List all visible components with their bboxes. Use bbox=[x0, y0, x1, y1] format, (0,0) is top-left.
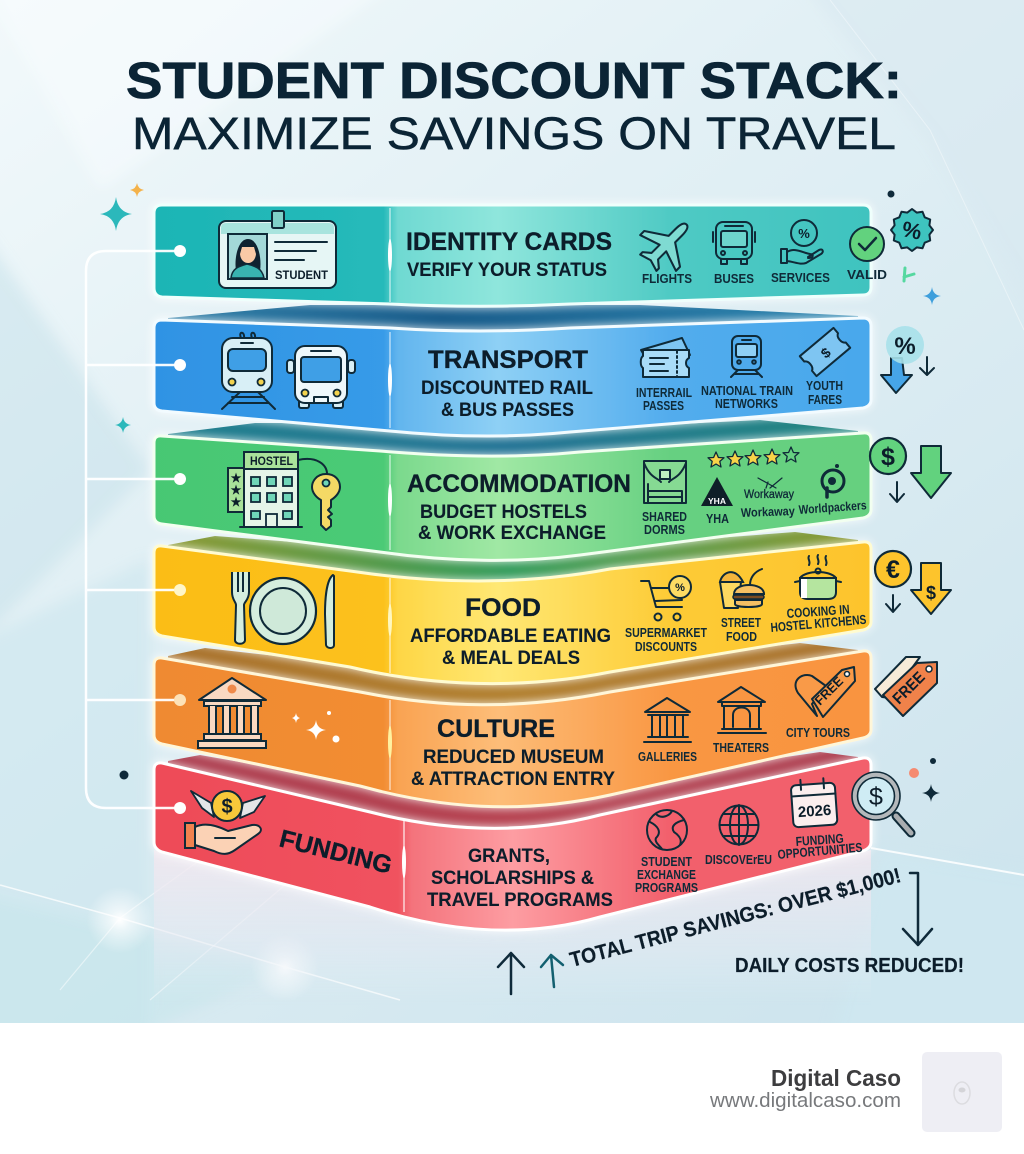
icon: street food bbox=[720, 569, 764, 608]
label: student exchange programs bbox=[635, 854, 698, 895]
label: buses: BUSES bbox=[714, 271, 754, 286]
text: transport description bbox=[421, 377, 593, 421]
label: student exchange programs: STUDENT bbox=[641, 854, 692, 869]
icon: cooking pot with steam bbox=[795, 555, 841, 599]
label: cooking in hostel kitchens: HOSTEL KITCHENS bbox=[770, 612, 867, 635]
label: flights: FLIGHTS bbox=[642, 271, 692, 286]
icon: galleries bbox=[644, 698, 691, 742]
label: shared dorms: SHARED bbox=[642, 509, 687, 524]
icon: dollar coin and arrows: $ bbox=[881, 443, 895, 471]
text: accommodation description bbox=[418, 501, 606, 544]
icon: theaters bbox=[718, 687, 766, 733]
icon: free price tag bbox=[875, 657, 937, 716]
label: cooking in hostel kitchens bbox=[770, 602, 867, 635]
icon: services hand bbox=[781, 220, 823, 264]
text: culture description bbox=[411, 746, 615, 790]
funding band reflection bbox=[154, 850, 871, 1005]
decorative sparkles left bbox=[100, 183, 144, 780]
panel: accommodation bbox=[154, 433, 871, 560]
icon: magnifying glass: $ bbox=[869, 783, 883, 811]
arrow: up small bbox=[541, 955, 563, 987]
label: funding opportunities bbox=[777, 831, 863, 862]
icon: percent drop arrows: % bbox=[894, 333, 916, 360]
icon: plane bbox=[630, 207, 704, 281]
icon: services hand: % bbox=[798, 226, 810, 241]
icon: hostel building and key bbox=[228, 452, 340, 530]
text: funding description: GRANTS, bbox=[468, 845, 550, 867]
text: culture description: REDUCED MUSEUM bbox=[423, 746, 604, 768]
icon: discovereu globe bbox=[720, 805, 758, 845]
icon: shared dorm bbox=[644, 461, 686, 503]
heading: culture: CULTURE bbox=[437, 715, 555, 743]
text: funding description bbox=[427, 845, 613, 911]
icon: train and bus bbox=[222, 333, 355, 409]
icon: supermarket cart bbox=[641, 576, 691, 620]
callout: daily costs reduced: DAILY COSTS REDUCED! bbox=[735, 955, 964, 977]
label: national train networks: NATIONAL TRAIN bbox=[701, 383, 793, 398]
icon: interrail ticket bbox=[641, 338, 690, 377]
icon: free price tag: FREE bbox=[890, 669, 929, 708]
label: galleries: GALLERIES bbox=[638, 749, 697, 764]
text: accommodation description: & WORK EXCHANGE bbox=[418, 522, 606, 544]
footer url: www.digitalcaso.com bbox=[709, 1090, 901, 1112]
label: cooking in hostel kitchens: COOKING IN bbox=[786, 602, 850, 621]
icon: euro coin and arrows bbox=[875, 551, 951, 614]
label: shared dorms bbox=[642, 509, 687, 537]
label: national train networks bbox=[701, 383, 793, 411]
heading: identity cards: IDENTITY CARDS bbox=[406, 228, 612, 256]
label: funding opportunities: FUNDING bbox=[795, 831, 844, 849]
icon: fork plate and knife bbox=[232, 572, 334, 648]
panel: identity cards bbox=[154, 205, 887, 306]
label: youth fares: YOUTH bbox=[806, 378, 843, 393]
icon: workaway logo: Workaway bbox=[744, 489, 794, 501]
icon: yha logo: YHA bbox=[708, 496, 726, 506]
label: theaters: THEATERS bbox=[713, 740, 769, 755]
heading: accommodation: ACCOMMODATION bbox=[407, 470, 631, 498]
label: discovereu: DISCOVErEU bbox=[705, 852, 772, 867]
label: youth fares: FARES bbox=[808, 392, 842, 407]
label: worldpackers: Worldpackers bbox=[798, 498, 867, 517]
icon: euro coin and arrows: $ bbox=[926, 583, 936, 603]
icon: hostel building and key: HOSTEL bbox=[250, 456, 293, 468]
icon: national train bbox=[731, 336, 762, 377]
icon: student id card bbox=[219, 211, 336, 288]
label: workaway: Workaway bbox=[741, 504, 795, 520]
icon: percent badge: % bbox=[900, 216, 924, 245]
label: youth fares bbox=[806, 378, 843, 407]
callout: total trip savings: TOTAL TRIP SAVINGS: OVER $1,000! bbox=[567, 864, 903, 972]
icon: museum bbox=[198, 678, 266, 748]
icon: supermarket cart: % bbox=[675, 582, 685, 594]
icon: winged coin and hand bbox=[185, 791, 265, 854]
icon: hostel building and key: ★ bbox=[231, 471, 242, 485]
text: funding description: SCHOLARSHIPS & bbox=[431, 867, 594, 889]
decorative dots near magnifier bbox=[909, 758, 940, 802]
label: street food: STREET bbox=[721, 615, 761, 630]
icon: winged coin and hand: $ bbox=[221, 796, 233, 818]
heading: food: FOOD bbox=[465, 594, 541, 622]
text: food description: AFFORDABLE EATING bbox=[410, 625, 611, 647]
icon: percent badge bbox=[888, 190, 941, 305]
icon: percent drop arrows bbox=[881, 326, 934, 393]
label: supermarket discounts: DISCOUNTS bbox=[635, 639, 697, 654]
icon: student id card: STUDENT bbox=[275, 270, 328, 282]
icon: student exchange globe bbox=[647, 810, 687, 850]
text: food description: & MEAL DEALS bbox=[442, 647, 580, 669]
icon: 2026 calendar bbox=[790, 778, 838, 827]
label: shared dorms: DORMS bbox=[644, 522, 685, 537]
icon: free city tour tag: FREE bbox=[812, 673, 846, 708]
text: culture description: & ATTRACTION ENTRY bbox=[411, 768, 615, 790]
heading: transport: TRANSPORT bbox=[428, 346, 588, 374]
icon: youth fare ticket: $ bbox=[818, 344, 834, 361]
label: supermarket discounts bbox=[625, 625, 707, 654]
label: services: SERVICES bbox=[771, 270, 830, 285]
text: identity cards description: VERIFY YOUR STATUS bbox=[407, 259, 607, 281]
text: food description bbox=[410, 625, 611, 669]
label: interrail passes: INTERRAIL bbox=[636, 385, 692, 400]
label: city tours: CITY TOURS bbox=[786, 725, 850, 740]
label: interrail passes: PASSES bbox=[643, 398, 684, 413]
arrow: down bbox=[903, 873, 932, 945]
panel: funding bbox=[154, 758, 871, 930]
panel: food bbox=[154, 542, 871, 684]
label: supermarket discounts: SUPERMARKET bbox=[625, 625, 707, 640]
icon: youth fare ticket bbox=[800, 328, 850, 376]
icon: dollar coin and arrows bbox=[870, 438, 951, 502]
text: funding description: TRAVEL PROGRAMS bbox=[427, 889, 613, 911]
icon: euro coin and arrows: € bbox=[886, 556, 900, 584]
heading: funding: FUNDING bbox=[277, 825, 395, 880]
title: MAXIMIZE SAVINGS ON TRAVEL bbox=[132, 108, 896, 159]
icon: yha logo bbox=[701, 477, 733, 506]
label: yha: YHA bbox=[706, 511, 730, 526]
icon: valid check bbox=[850, 227, 884, 261]
icon: 2026 calendar: 2026 bbox=[797, 802, 832, 821]
panel: transport bbox=[154, 318, 871, 436]
label: student exchange programs: PROGRAMS bbox=[635, 880, 698, 895]
icon: star rating bbox=[708, 447, 799, 467]
icon: hostel building and key: ★ bbox=[231, 483, 242, 497]
title: STUDENT DISCOUNT STACK: bbox=[126, 52, 902, 109]
label: street food: FOOD bbox=[726, 629, 757, 644]
text: transport description: DISCOUNTED RAIL bbox=[421, 377, 593, 399]
footer logo bbox=[922, 1052, 1002, 1132]
text: transport description: & BUS PASSES bbox=[441, 399, 574, 421]
footer bbox=[0, 1023, 1024, 1154]
icon: free city tour tag bbox=[796, 667, 855, 717]
icon: magnifying glass bbox=[852, 772, 911, 833]
label: interrail passes bbox=[636, 385, 692, 413]
label: student exchange programs: EXCHANGE bbox=[637, 867, 696, 882]
icon: worldpackers logo bbox=[822, 464, 844, 497]
connector lines bbox=[86, 245, 186, 814]
label: street food bbox=[721, 615, 761, 644]
icon: workaway logo bbox=[744, 478, 794, 501]
layer shadow wedges between bands bbox=[168, 305, 858, 830]
footer brand name: Digital Caso bbox=[771, 1065, 901, 1091]
text: accommodation description: BUDGET HOSTELS bbox=[420, 501, 587, 523]
icon: hostel building and key: ★ bbox=[231, 495, 242, 509]
label: national train networks: NETWORKS bbox=[715, 396, 778, 411]
panel: culture bbox=[154, 651, 871, 807]
icon: sparkles bbox=[292, 711, 340, 742]
label: funding opportunities: OPPORTUNITIES bbox=[777, 840, 863, 862]
icon: bus bbox=[713, 222, 755, 264]
label: valid: VALID bbox=[847, 267, 887, 282]
arrow: up large bbox=[498, 953, 524, 994]
title bbox=[126, 52, 902, 159]
